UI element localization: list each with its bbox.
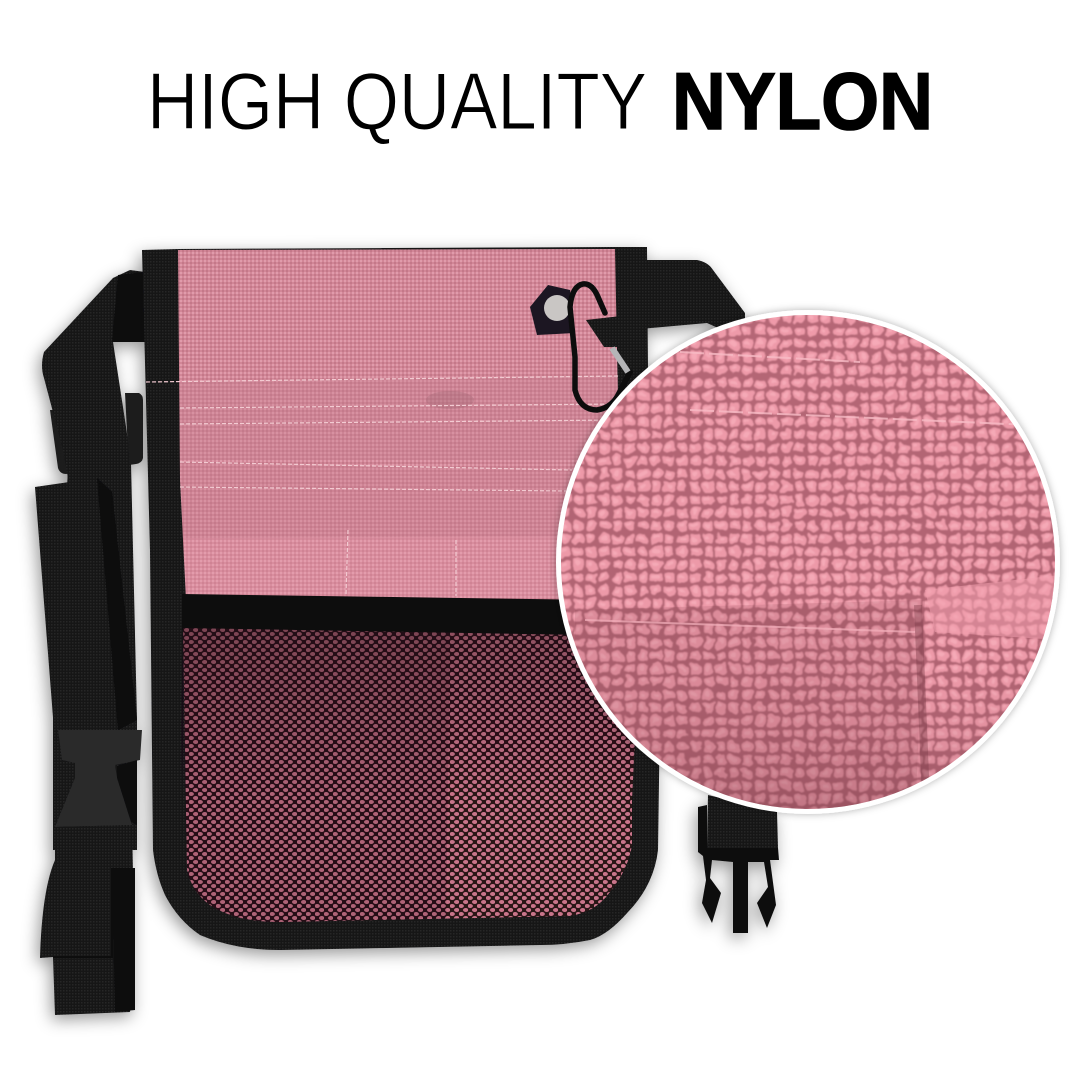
silver gate	[612, 348, 628, 372]
mesh pocket	[180, 628, 640, 922]
side release buckle	[55, 730, 142, 827]
lower strap fold	[112, 868, 135, 1012]
seam highlight	[585, 620, 915, 632]
long hanging strap	[53, 464, 137, 850]
strap fold	[35, 478, 122, 730]
white ring	[556, 310, 1060, 814]
magnified fabric circle	[545, 300, 1071, 826]
upper pink fabric	[178, 249, 618, 600]
woven macro texture	[561, 315, 1055, 809]
slider buckle	[50, 393, 143, 474]
tone overlay	[612, 695, 1008, 809]
clip strap	[586, 313, 647, 347]
left strap with slider buckle	[35, 270, 145, 1015]
zipper	[182, 594, 600, 636]
stitch lines	[146, 376, 620, 596]
right waist strap	[640, 260, 745, 340]
upper folded strap	[42, 270, 145, 478]
buckle dark gaps	[117, 760, 137, 825]
buckle frame	[698, 805, 779, 933]
product: belt pouch	[35, 247, 779, 1015]
pouch binding	[142, 247, 660, 950]
bright seam band	[925, 575, 1060, 640]
fabric fold shading	[180, 376, 618, 598]
title: HIGH QUALITY	[147, 57, 647, 147]
title: NYLON	[672, 57, 933, 147]
pocket seam area	[575, 600, 925, 815]
upper stitches	[680, 352, 1030, 425]
right strap end with buckle	[698, 795, 779, 933]
carabiner clip	[530, 284, 647, 410]
fold side shadow	[97, 478, 137, 730]
grommet	[530, 285, 575, 335]
metal ball	[544, 295, 570, 321]
strap end	[707, 795, 778, 848]
strap shadow fold	[112, 272, 145, 342]
clip body	[570, 284, 630, 410]
vertical seam shadow	[918, 605, 926, 800]
lower strap	[40, 825, 135, 1015]
